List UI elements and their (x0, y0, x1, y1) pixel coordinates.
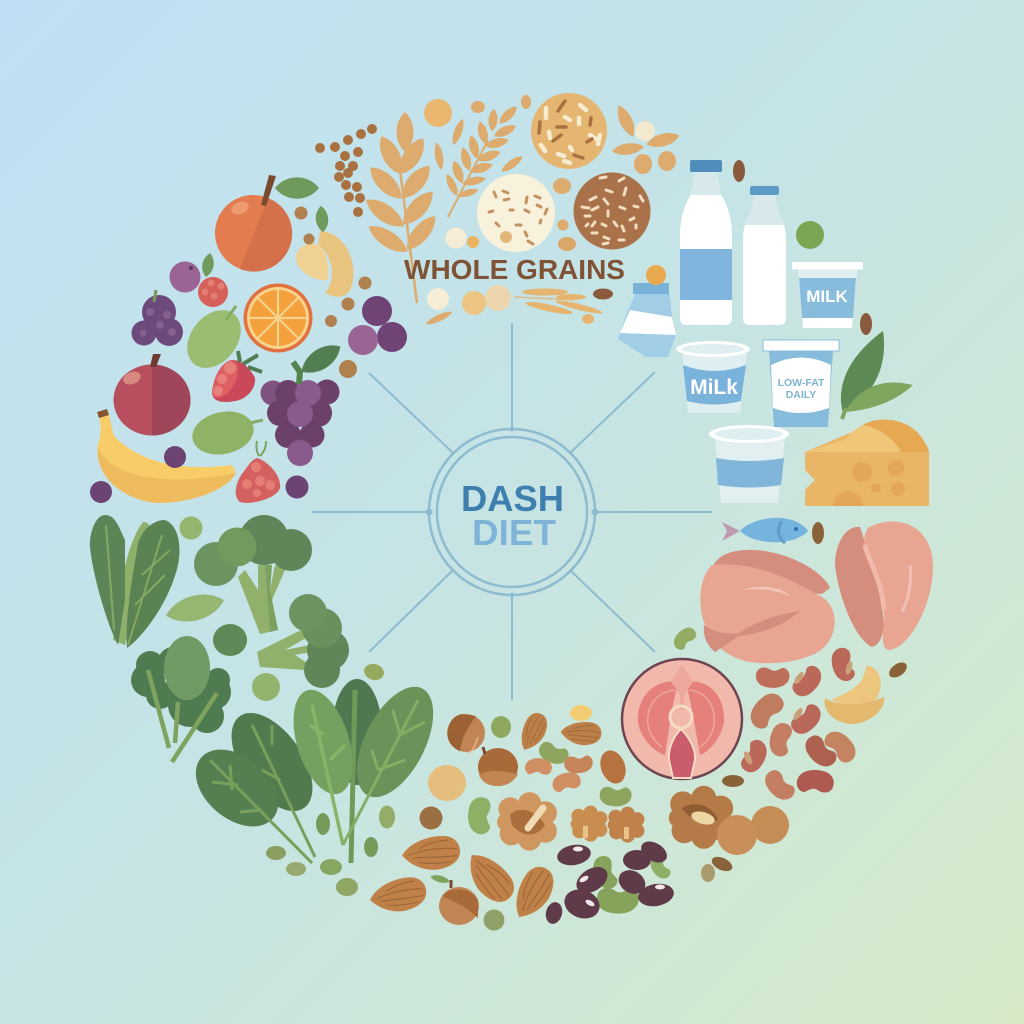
icon: plain yogurt cup (709, 425, 789, 503)
brown bean 2 (860, 313, 872, 335)
icon: blueberry and raspberry (170, 252, 228, 307)
icon: large grape bunch (260, 338, 346, 466)
pea lower (484, 910, 504, 930)
icon: walnut and hazelnuts (669, 786, 789, 855)
title: DIET: DIET (472, 512, 556, 553)
icon: broccoli small (257, 594, 349, 688)
icon: second milk bottle (743, 186, 786, 325)
icon: banana (97, 409, 236, 503)
icon: chicken breast (835, 521, 933, 650)
brown bean 3 (812, 522, 824, 544)
icon: raspberry (236, 441, 280, 503)
icon: milk yogurt cup (676, 341, 750, 413)
spokes (312, 323, 712, 700)
icon: walnut halves (571, 806, 644, 843)
icon: orange fruit (215, 175, 319, 272)
panel: fruits (90, 175, 407, 503)
scattered grains (446, 178, 576, 251)
hub connector dots (426, 426, 598, 598)
icon: lettuce sprigs (131, 636, 231, 762)
brown small ovals (701, 659, 910, 882)
panel: whole grains (315, 93, 681, 327)
green pea 1 (491, 716, 511, 738)
brown grain cluster (315, 124, 377, 217)
label: MILK: MILK (806, 287, 848, 306)
icon: large walnut (497, 792, 557, 851)
title: DASH: DASH (461, 478, 564, 519)
green peas (266, 806, 395, 896)
icon: strawberry (212, 351, 262, 402)
label: low-fat daily: LOW-FAT (778, 377, 825, 389)
brown bean (733, 160, 745, 182)
icon: small bottle (618, 265, 676, 357)
icon: spinach left pair (181, 699, 329, 863)
icon: flat light leaf (163, 588, 227, 628)
icon: green plum 2 (188, 406, 263, 460)
heading: whole grains: WHOLE GRAINS (404, 254, 625, 285)
icon: dark kidney beans (543, 837, 676, 926)
icon: blueberries (348, 296, 407, 355)
brown seeds (294, 206, 372, 378)
icon: meat cross-section (622, 659, 742, 779)
icon: almonds upper (514, 705, 630, 787)
berries (90, 446, 308, 503)
icon: cashew (825, 666, 884, 724)
green bean (670, 624, 699, 652)
lower grain row (424, 285, 613, 327)
icon: broccoli large (194, 515, 312, 634)
icon: green plum (176, 300, 252, 378)
icon: red and tan beans (739, 646, 861, 805)
icon: oat cookie (531, 93, 607, 169)
icon: spinach right trio (282, 675, 449, 863)
icon: fish (722, 518, 808, 543)
panel: lean protein (622, 518, 933, 882)
icon: top leaf (315, 206, 329, 232)
icon: acorn with leaf (429, 873, 479, 925)
icon: orange slice (244, 284, 312, 352)
icon: green legumes (589, 854, 673, 914)
icon: cheese wedge (805, 420, 929, 506)
center hub and spokes (312, 323, 712, 700)
icon: cream grain bowl (477, 174, 555, 252)
panel: leafy greens (90, 515, 449, 896)
icon: small mixed beans (525, 740, 632, 806)
icon: low-fat daily cup (763, 340, 839, 427)
icon: small wheat sprig (433, 95, 531, 217)
icon: pea (252, 673, 280, 701)
icon: small dark leaf (213, 624, 247, 656)
icon: pecan (428, 765, 466, 801)
hub rings (429, 429, 595, 595)
label: Milk: MiLk (690, 376, 738, 399)
green bean big (468, 797, 491, 834)
golden round grain (424, 99, 452, 127)
seed dots (420, 806, 442, 830)
icon: cashew pair (296, 231, 353, 297)
icon: olive (796, 221, 824, 249)
icon: dairy leaves (841, 331, 913, 419)
seed oval (362, 662, 386, 682)
icon: red apple (114, 354, 190, 436)
icon: whole chicken (700, 550, 835, 663)
icon: large wheat sprig (361, 112, 441, 303)
panel: nuts, seeds and legumes (368, 705, 676, 930)
icon: chestnut (478, 747, 518, 786)
panel: low-fat dairy (618, 160, 929, 506)
icon: brown rice bowl (574, 172, 650, 250)
icon: almonds lower (368, 835, 561, 925)
icon: chard bunch (90, 515, 179, 648)
icon: hazelnuts (447, 714, 485, 753)
right grain cluster (611, 103, 681, 174)
label: low-fat daily: DAILY (786, 389, 816, 401)
icon: small grape cluster (132, 290, 183, 346)
icon: milk cup (792, 262, 863, 328)
icon: tall milk bottle (680, 160, 732, 325)
icon: small round leaf (180, 516, 202, 540)
